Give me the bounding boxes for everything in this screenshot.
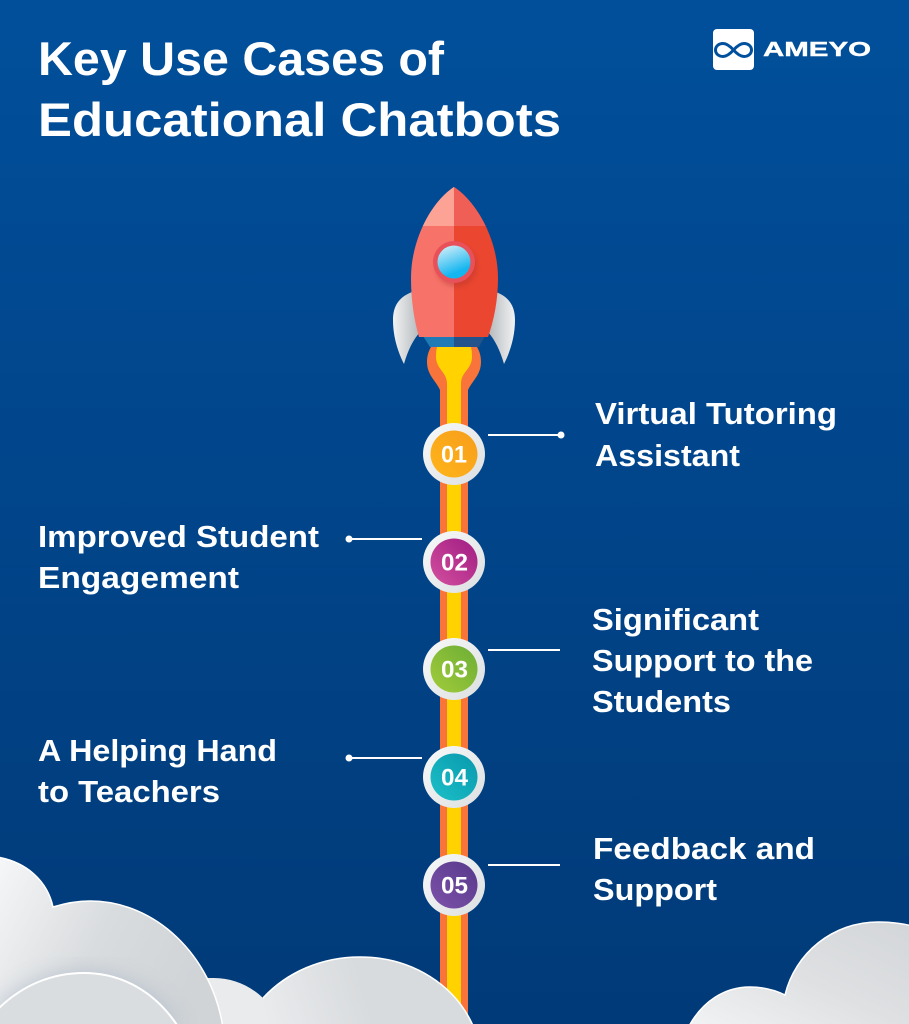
badge 05	[423, 854, 485, 916]
cloud: large left	[0, 857, 223, 1024]
label 02: Improved Student	[38, 519, 319, 554]
connector 01	[488, 432, 564, 438]
rocket base	[423, 336, 485, 347]
title: Educational Chatbots	[38, 93, 561, 146]
badge 03	[423, 638, 485, 700]
cloud: bottom right	[688, 922, 909, 1024]
label 03: Significant	[592, 602, 759, 637]
label 02: Engagement	[38, 560, 239, 595]
connector 02	[346, 536, 422, 542]
title	[38, 32, 561, 146]
connector 03	[488, 649, 560, 651]
label 03	[592, 602, 813, 719]
badge 04: 04	[441, 764, 469, 792]
label 01: Virtual Tutoring	[595, 396, 837, 431]
cloud: front left	[0, 973, 179, 1024]
cloud: centre	[262, 957, 474, 1024]
step 05: Feedback and Support	[423, 831, 815, 916]
rocket exhaust trail	[440, 375, 468, 1024]
label 04: A Helping Hand	[38, 733, 277, 768]
badge 03: 03	[441, 656, 468, 684]
cloud: small centre-left	[205, 978, 264, 1024]
step 01: Virtual Tutoring Assistant	[423, 396, 837, 485]
label 01: Assistant	[595, 438, 740, 473]
badge 05: 05	[441, 872, 468, 900]
cloud shading behind front cloud	[0, 973, 179, 1024]
step 04: A Helping Hand to Teachers	[38, 733, 485, 809]
connector 05	[488, 864, 560, 866]
logo: Ameyo	[713, 29, 871, 70]
label 04: to Teachers	[38, 774, 220, 809]
label 05: Feedback and	[593, 831, 815, 866]
step 03: Significant Support to the Students	[423, 602, 813, 719]
label 04	[38, 733, 277, 809]
label 03: Support to the	[592, 643, 813, 678]
rocket body	[411, 187, 498, 337]
label 05: Support	[593, 872, 717, 907]
badge 01	[423, 423, 485, 485]
rocket porthole	[433, 241, 477, 287]
badge 01: 01	[441, 442, 467, 468]
badge 02	[423, 531, 485, 593]
rocket flame	[427, 347, 481, 400]
label 05	[593, 831, 815, 907]
badge 04	[423, 746, 485, 808]
label 01	[595, 396, 837, 473]
icon: rocket	[393, 187, 515, 400]
cloud: centre highlight edge	[263, 957, 474, 1024]
rocket fins	[393, 292, 515, 364]
icon: infinity badge	[713, 29, 754, 70]
label 02	[38, 519, 319, 595]
label 03: Students	[592, 684, 731, 719]
connector 04	[346, 754, 422, 762]
step 02: Improved Student Engagement	[38, 519, 485, 595]
badge 02: 02	[441, 550, 468, 576]
clouds: bottom left	[0, 857, 474, 1024]
logo: Ameyo: AMEYO	[763, 39, 871, 61]
title: Key Use Cases of	[38, 32, 444, 85]
